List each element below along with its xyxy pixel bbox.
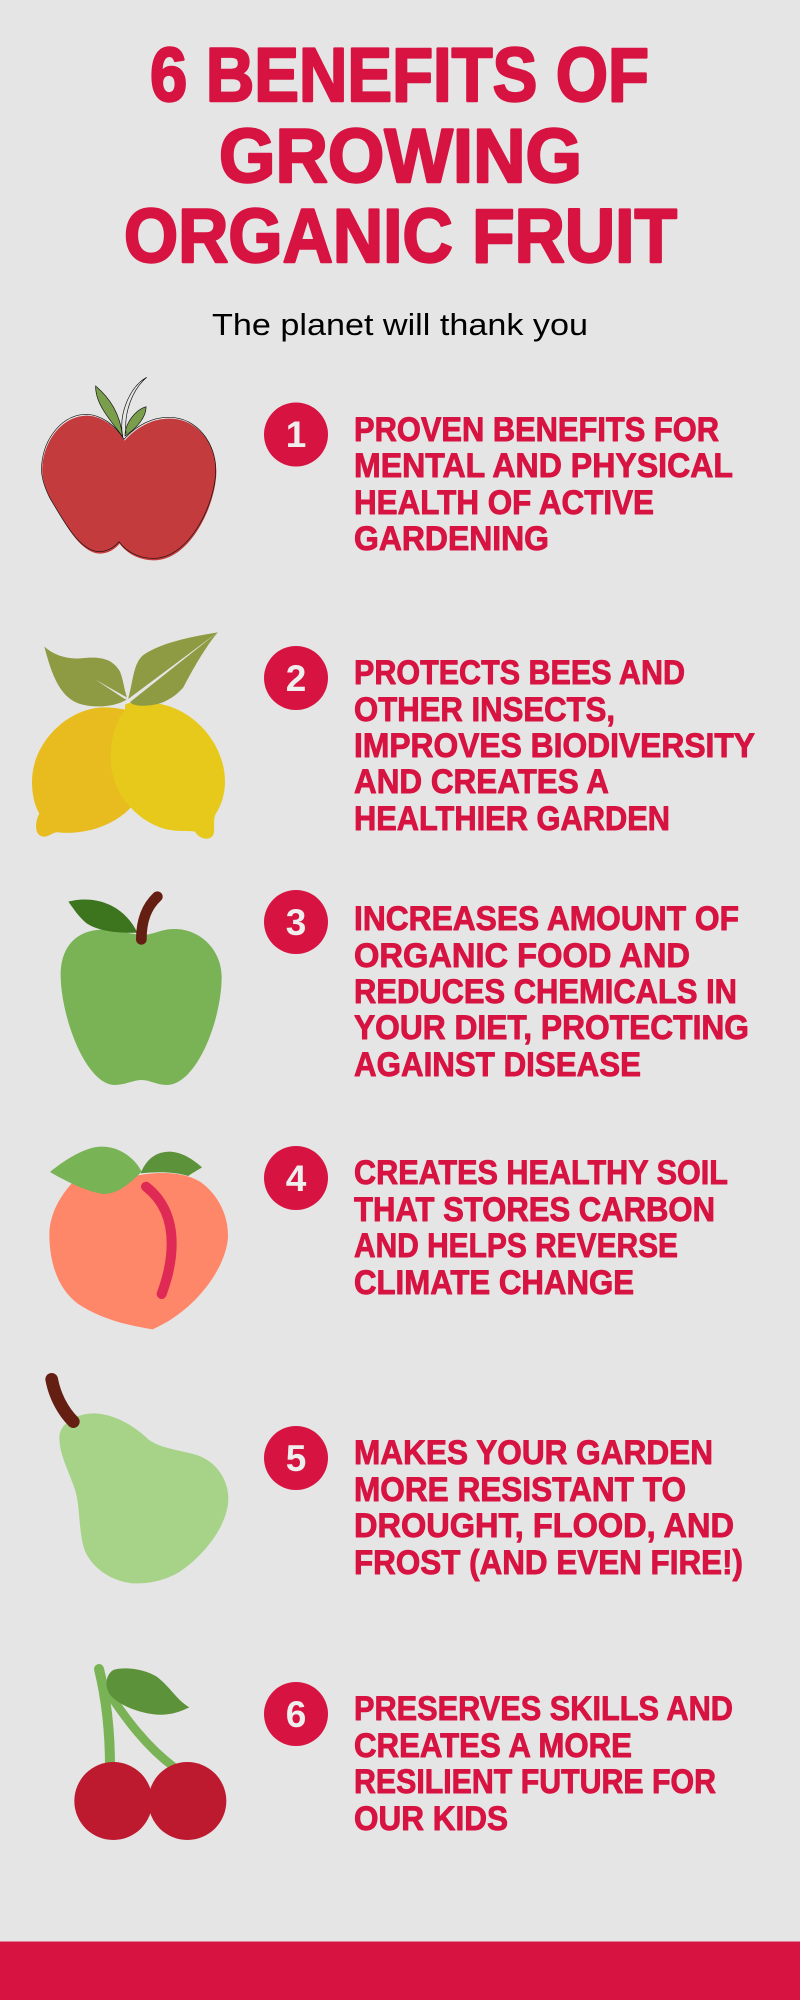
- benefit 2 text: [354, 654, 755, 838]
- benefit 3 text: AGAINST DISEASE: [354, 1046, 641, 1084]
- panel: benefit 6: [74, 1668, 733, 1840]
- number badge 3: 3: [286, 902, 306, 943]
- panel: benefit 1: [41, 377, 733, 560]
- title: GROWING: [219, 114, 582, 199]
- benefit 1 text: HEALTH OF ACTIVE: [354, 484, 654, 522]
- benefit 3 text: INCREASES AMOUNT OF: [354, 900, 739, 938]
- benefit 2 text: HEALTHIER GARDEN: [354, 800, 670, 838]
- icon: lemons: [32, 632, 225, 839]
- benefit 1 text: [354, 411, 733, 558]
- title: 6 BENEFITS OF: [150, 33, 649, 118]
- number badge 5: 5: [286, 1438, 306, 1479]
- number badge 1: 1: [286, 414, 306, 455]
- benefit 2 text: PROTECTS BEES AND: [354, 654, 685, 692]
- benefit 4 text: AND HELPS REVERSE: [354, 1227, 678, 1265]
- number badge 6: 6: [286, 1694, 306, 1735]
- benefit 2 text: IMPROVES BIODIVERSITY: [354, 727, 755, 765]
- title: [124, 33, 677, 279]
- benefit 2 text: OTHER INSECTS,: [354, 691, 615, 729]
- icon: red apple: [41, 377, 216, 560]
- benefit 4 text: CLIMATE CHANGE: [354, 1264, 634, 1302]
- panel: benefit 3: [61, 890, 749, 1085]
- number badge 1: [264, 402, 328, 466]
- benefit 3 text: [354, 900, 749, 1084]
- benefit 6 text: PRESERVES SKILLS AND: [354, 1690, 733, 1728]
- benefit 5 text: DROUGHT, FLOOD, AND: [354, 1507, 734, 1545]
- number badge 2: 2: [286, 658, 306, 699]
- icon: green apple: [61, 897, 222, 1085]
- number badge 4: [264, 1146, 328, 1210]
- benefit 4 text: CREATES HEALTHY SOIL: [354, 1154, 728, 1192]
- benefit 6 text: [354, 1690, 733, 1838]
- benefit 3 text: YOUR DIET, PROTECTING: [354, 1009, 749, 1047]
- number badge 6: [264, 1682, 328, 1746]
- benefit 6 text: CREATES A MORE: [354, 1727, 632, 1765]
- icon: cherries: [74, 1668, 226, 1840]
- benefit 5 text: FROST (AND EVEN FIRE!): [354, 1544, 743, 1582]
- benefit 5 text: [354, 1434, 743, 1582]
- benefit 3 text: REDUCES CHEMICALS IN: [354, 973, 737, 1011]
- icon: peach: [49, 1147, 228, 1329]
- number badge 5: [264, 1426, 328, 1490]
- benefit 2 text: AND CREATES A: [354, 763, 609, 801]
- number badge 2: [264, 646, 328, 710]
- number badge 4: 4: [286, 1158, 307, 1199]
- icon: pear: [52, 1379, 228, 1583]
- benefit 1 text: MENTAL AND PHYSICAL: [354, 447, 733, 485]
- benefit 5 text: MAKES YOUR GARDEN: [354, 1434, 713, 1472]
- benefit 5 text: MORE RESISTANT TO: [354, 1471, 686, 1509]
- title: ORGANIC FRUIT: [124, 194, 677, 279]
- benefit 1 text: GARDENING: [354, 520, 549, 558]
- panel: benefit 5: [52, 1379, 743, 1583]
- benefit 1 text: PROVEN BENEFITS FOR: [354, 411, 719, 449]
- number badge 3: [264, 890, 328, 954]
- panel: benefit 2: [32, 632, 755, 839]
- benefit 4 text: [354, 1154, 728, 1302]
- benefit 4 text: THAT STORES CARBON: [354, 1191, 715, 1229]
- panel: benefit 4: [49, 1146, 728, 1329]
- benefit 3 text: ORGANIC FOOD AND: [354, 937, 690, 975]
- subtitle: The planet will thank you: [212, 307, 588, 342]
- benefit 6 text: RESILIENT FUTURE FOR: [354, 1763, 716, 1801]
- benefit 6 text: OUR KIDS: [354, 1800, 508, 1838]
- footer bar: [0, 1942, 800, 2000]
